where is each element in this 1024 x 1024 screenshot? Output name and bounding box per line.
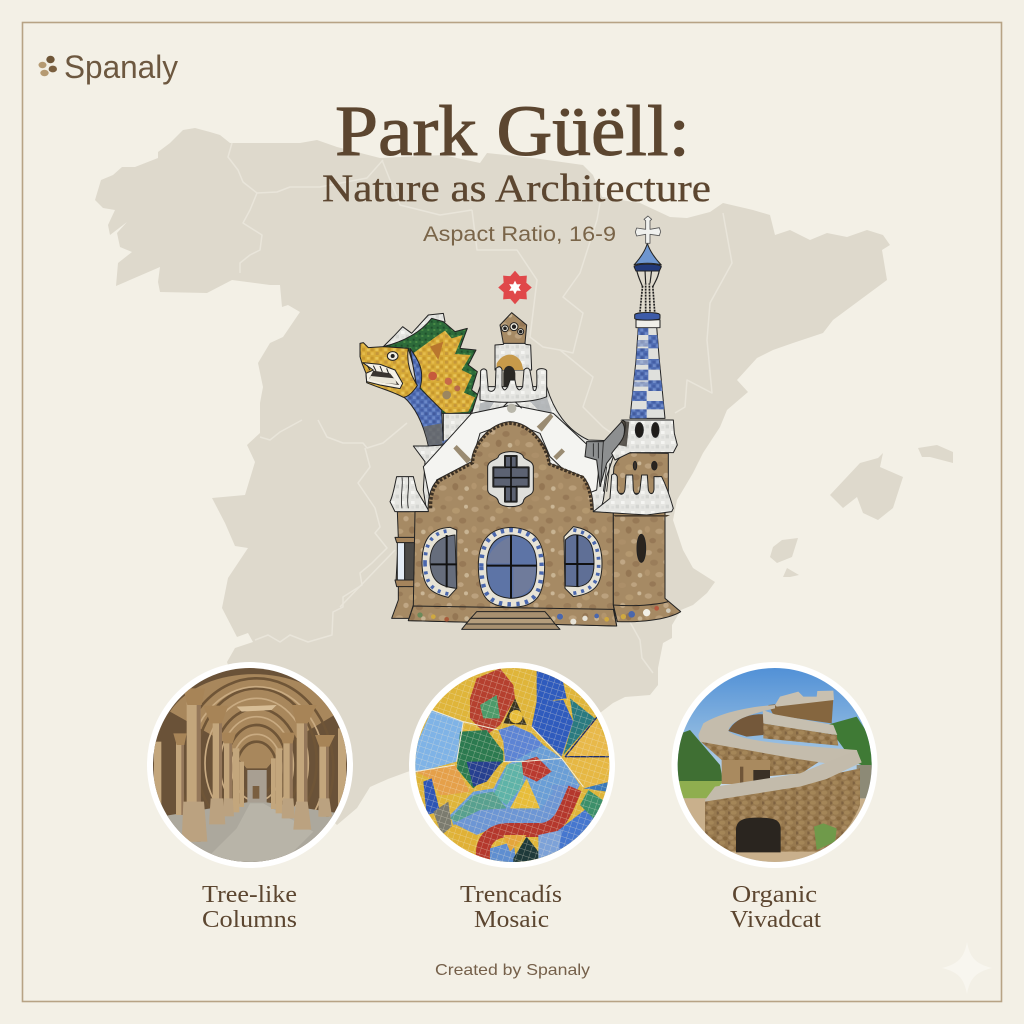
- viaduct: top wall: [768, 698, 833, 723]
- roof: [413, 387, 624, 512]
- icon: sparkle: [942, 942, 992, 994]
- caption: trencadis mosaic: Trencadís: [460, 882, 562, 908]
- photo: mosaic: [413, 665, 613, 865]
- logo: [38, 49, 178, 85]
- subtitle: Nature as Architecture: [322, 167, 711, 210]
- caption: organic viaduct: Organic: [732, 882, 817, 908]
- left window: [422, 527, 457, 597]
- footer credit: Created by Spanaly: [435, 962, 590, 979]
- right tower: lower white crown: [593, 474, 673, 515]
- photo ring: columns: [147, 662, 353, 868]
- map of Spain: [95, 128, 953, 825]
- photo: columned hall: [150, 665, 350, 865]
- title: Park Güëll:: [335, 91, 690, 171]
- main wall: mosaic plinth: [408, 606, 617, 626]
- right window: [564, 527, 602, 597]
- viaduct: tunnel door: [736, 818, 781, 852]
- steps: [462, 612, 560, 629]
- icon: red star marker: [498, 271, 532, 304]
- roof: grey scale tiles: [585, 422, 624, 487]
- logo icon: [38, 56, 57, 76]
- map: region borders: [228, 143, 732, 673]
- caption: trencadis mosaic: Mosaic: [474, 907, 549, 933]
- logo wordmark: Spanaly: [64, 49, 178, 85]
- right tower: [593, 420, 681, 622]
- left turret: [390, 477, 429, 618]
- map: Balearic Islands: [770, 445, 953, 577]
- viaduct: lower wall: [705, 768, 860, 852]
- spire: [628, 216, 665, 419]
- caption: organic viaduct: Vivadcat: [730, 907, 821, 933]
- photo ring: mosaic: [409, 662, 615, 868]
- central window: [478, 527, 545, 607]
- main wall: [408, 422, 617, 626]
- upper cross window: [488, 452, 533, 507]
- photo: spiral viaduct: [678, 668, 872, 862]
- feature: organic viaduct: [672, 662, 880, 933]
- photo ring: viaduct: [672, 662, 878, 868]
- feature: trencadis mosaic: [409, 662, 615, 933]
- feature: tree-like columns: [147, 662, 353, 933]
- crenellated top and small turret: [480, 313, 547, 402]
- illustration: Park Güell gatehouse with dragon: [360, 216, 681, 629]
- viaduct: upper ramp: [700, 741, 827, 777]
- dragon: [360, 313, 481, 446]
- caption: tree-like columns: Tree-like: [202, 882, 297, 908]
- caption: tree-like columns: Columns: [202, 907, 297, 933]
- right tower: upper white crown: [612, 420, 677, 460]
- tagline: Aspact Ratio, 16-9: [423, 223, 616, 246]
